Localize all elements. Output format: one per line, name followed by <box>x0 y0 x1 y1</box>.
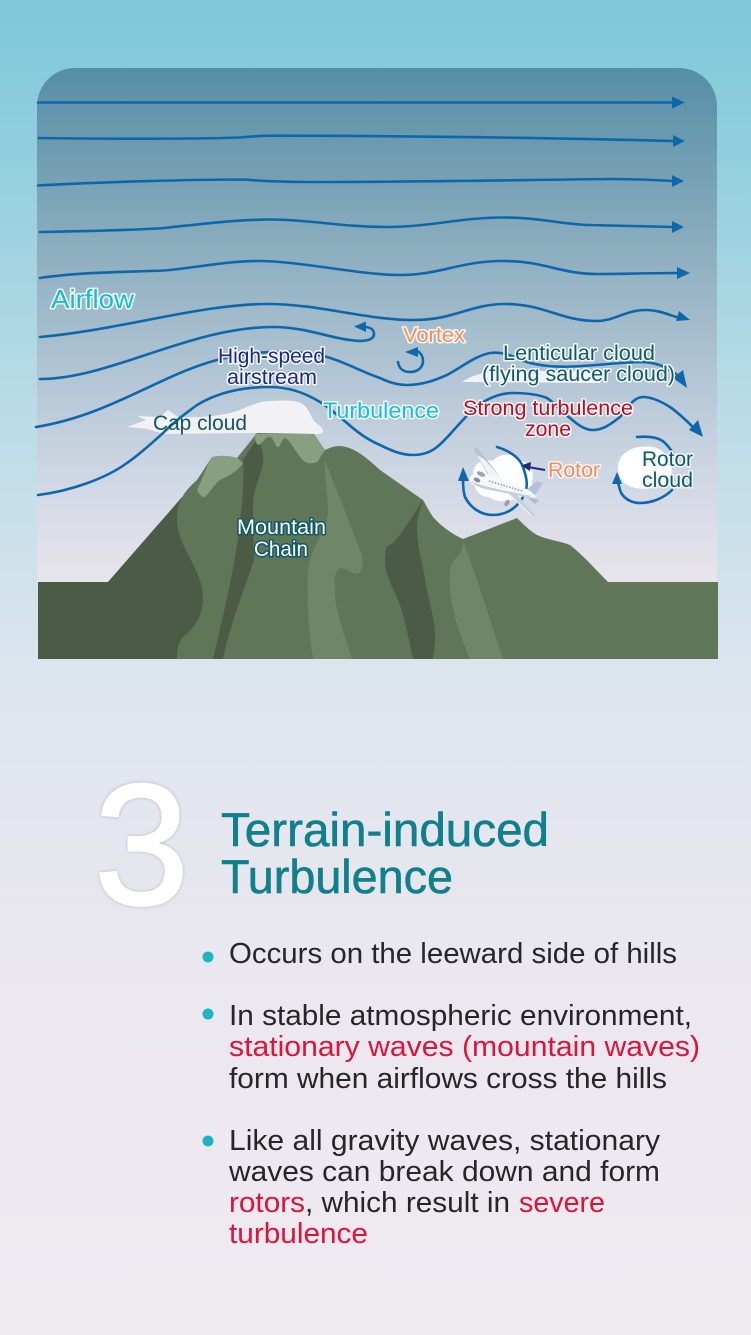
label: lenticular cloud: (flying saucer cloud) <box>482 363 675 386</box>
bullet 3: Like all gravity waves, stationary <box>229 1125 661 1157</box>
label: rotor cloud: Rotor <box>642 448 693 471</box>
bullet 3 <box>202 1125 661 1250</box>
heading: Turbulence <box>221 850 453 903</box>
airflow line 6 <box>40 304 690 337</box>
bullet 2: In stable atmospheric environment, <box>229 1000 692 1032</box>
rotor circulation arrow around plane <box>458 447 527 515</box>
bullet 2 <box>202 1000 700 1095</box>
airplane <box>469 447 543 516</box>
label: turbulence: Turbulence <box>323 398 439 423</box>
section number 3: 3 <box>94 749 189 941</box>
label: high-speed airstream: High-speed <box>218 345 325 368</box>
panel: mountain wave diagram <box>36 68 718 659</box>
label: rotor: Rotor <box>548 459 600 482</box>
cap cloud <box>127 400 323 434</box>
label: mountain chain: Chain <box>254 538 308 561</box>
label: rotor cloud <box>642 448 693 492</box>
bullet 3: rotors <box>229 1187 305 1219</box>
bullet 3: , which result in <box>305 1187 510 1219</box>
label: strong turbulence zone: zone <box>525 418 571 441</box>
rotor cloud shape <box>618 446 672 489</box>
label: high-speed airstream: airstream <box>227 366 317 389</box>
bullet 3: turbulence <box>229 1218 368 1250</box>
label: lenticular cloud: Lenticular cloud <box>503 342 655 365</box>
heading: Terrain-induced <box>221 803 549 856</box>
rotor cloud circulation arrows <box>612 437 673 503</box>
mountain chain <box>38 433 718 659</box>
heading <box>221 803 549 903</box>
label: cap cloud: Cap cloud <box>153 412 247 435</box>
airflow line 9 <box>38 387 703 495</box>
airflow line 1 <box>38 96 685 108</box>
airflow line 7 with vortex hook <box>40 322 374 379</box>
airflow line 3 <box>38 175 684 187</box>
rotor cloud shape around plane <box>473 455 533 501</box>
airflow line 5 <box>40 261 690 279</box>
bullet 3: severe <box>519 1187 605 1219</box>
label: mountain chain <box>237 516 326 561</box>
bullet 3: waves can break down and form <box>228 1156 660 1188</box>
label: strong turbulence zone <box>463 397 633 441</box>
label: airflow: Airflow <box>51 284 134 314</box>
lenticular cloud <box>462 371 600 383</box>
bullet 2: stationary waves (mountain waves) <box>229 1031 700 1063</box>
bullet 2: form when airflows cross the hills <box>229 1063 667 1095</box>
rotor pointer arrow <box>521 462 545 471</box>
label: mountain chain: Mountain <box>237 516 326 539</box>
label: vortex: Vortex <box>403 324 466 347</box>
airflow line 2 <box>39 135 685 147</box>
airflow line 4 <box>40 218 684 233</box>
bullet 1: Occurs on the leeward side of hills <box>229 938 677 970</box>
airflow line 8 <box>36 352 687 427</box>
sky panel <box>37 68 717 582</box>
label: high-speed airstream <box>218 345 325 389</box>
label: rotor cloud: cloud <box>642 469 693 492</box>
label: lenticular cloud <box>482 342 675 386</box>
label: strong turbulence zone: Strong turbulence <box>463 397 633 420</box>
vortex arrow <box>398 347 423 372</box>
